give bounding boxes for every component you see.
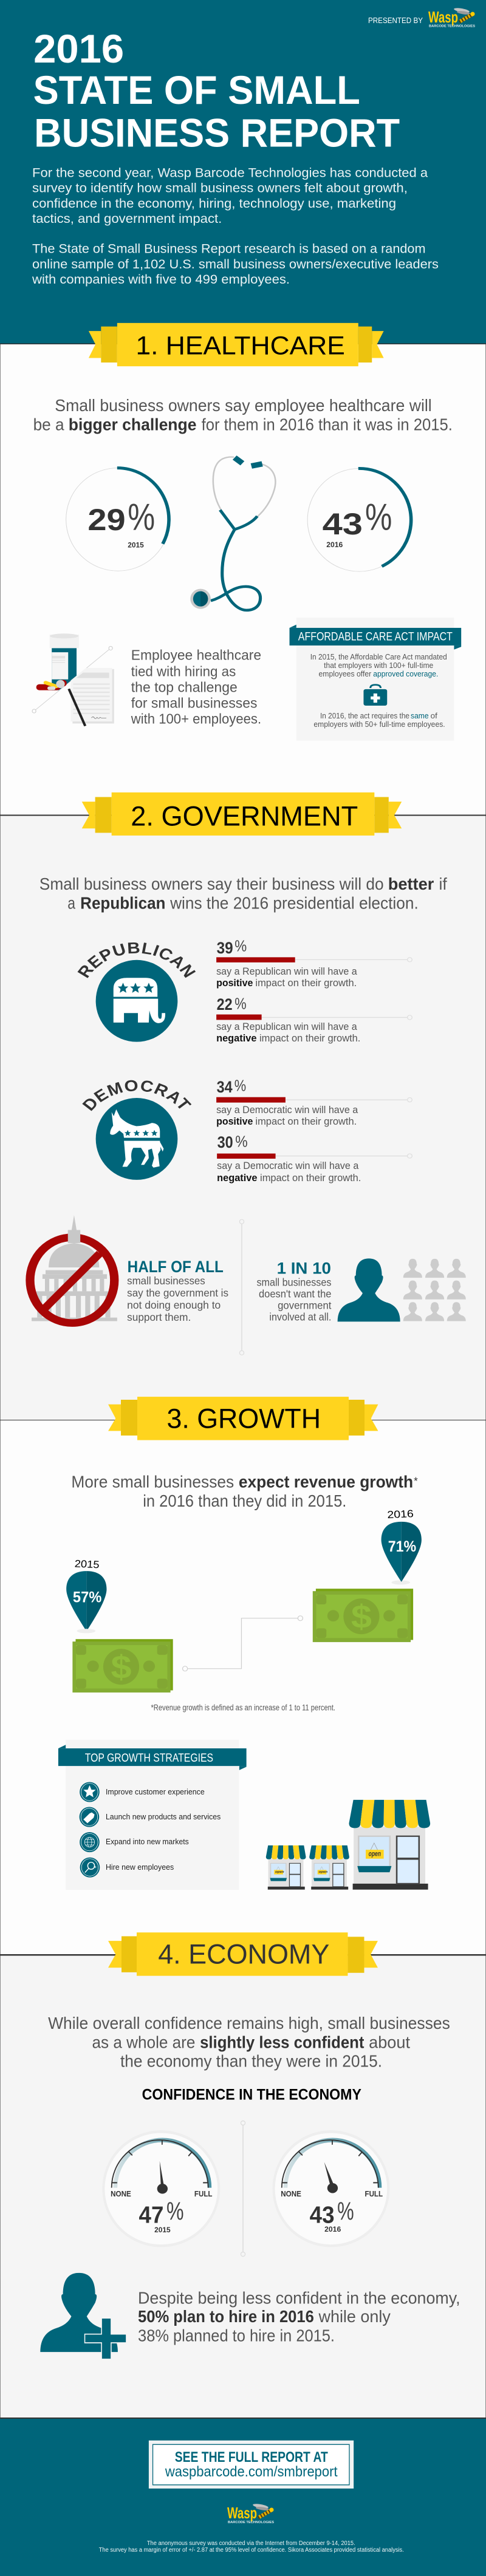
strategy: improve customer experience [80, 1782, 205, 1802]
icon: one in ten people [338, 1258, 466, 1321]
banner: 2. government [82, 792, 402, 836]
logo: presented by Wasp Barcode Technologies: Wasp [428, 8, 458, 26]
stat: 30% negative democrat: impact on their growth. [260, 1172, 361, 1184]
fine print [99, 2540, 404, 2554]
text: hiring plans: 38% planned to hire in 2015. [138, 2326, 335, 2345]
gauge: 47% 2015: % [166, 2197, 184, 2226]
title [33, 27, 400, 155]
strategy: improve customer experience: Improve customer experience [106, 1787, 205, 1796]
section: healthcare [32, 397, 461, 741]
heading: * [414, 1475, 418, 1487]
stat: 30% negative democrat: % [235, 1133, 248, 1150]
text: top challenge: Employee healthcare [131, 648, 261, 663]
stat: 22% negative republican: impact on their growth. [259, 1032, 360, 1044]
stat: 39% positive republican: impact on their growth. [255, 977, 357, 989]
heading: if [439, 875, 447, 894]
banner: 3. growth [108, 1397, 378, 1440]
pin: 2015 57%: 57% [73, 1589, 101, 1606]
callout: 1 in 10: involved at all. [269, 1312, 331, 1323]
gauge: 47% 2015: FULL [194, 2189, 213, 2198]
stat: 34% positive democrat: 34 [217, 1078, 233, 1097]
stat: 34% positive democrat: % [234, 1077, 246, 1094]
heading: expect revenue growth [239, 1473, 413, 1491]
stat: 22% negative republican: say a Republican win will have a [216, 1021, 358, 1032]
text: hiring plans: Despite being less confident in the economy, [138, 2289, 460, 2308]
title: STATE OF SMALL [33, 68, 360, 112]
footnote: *Revenue growth is defined as an increase of 1 to 11 percent. [151, 1703, 335, 1712]
text: top challenge: the top challenge [131, 680, 238, 695]
panel: affordable care act impact [290, 618, 461, 741]
stat: 34% positive democrat: say a Democratic win will have a [216, 1104, 358, 1116]
panel: affordable care act impact: of [431, 711, 437, 720]
text: hiring plans: while only [318, 2307, 391, 2326]
icon: first aid kit [363, 685, 387, 706]
panel: affordable care act impact: In 2016, the act requires the [320, 711, 409, 720]
callout: half of all [127, 1258, 228, 1324]
stat: 30% negative democrat: say a Democratic win will have a [217, 1160, 359, 1171]
stat: 30% negative democrat: negative [217, 1172, 257, 1184]
stat: 22% negative republican: negative [216, 1032, 256, 1044]
introduction text [32, 166, 439, 287]
donut: 29% 2015: % [128, 496, 155, 538]
gauge: 47% 2015: 2015 [154, 2226, 171, 2234]
callout: half of all: support them. [127, 1312, 191, 1324]
callout: 1 in 10: small businesses [256, 1277, 331, 1289]
heading line: the economy than they were in 2015. [120, 2052, 382, 2071]
section: government callouts and growth heading [30, 1215, 466, 1631]
icon: republican elephant [78, 942, 196, 1042]
call to action box: SEE THE FULL REPORT AT [175, 2448, 328, 2465]
gauge: 47% 2015: 47 [139, 2201, 163, 2228]
text: top challenge: tied with hiring as [131, 664, 236, 680]
section: growth illustrations and economy heading [48, 1589, 450, 2052]
text: hiring plans: 50% plan to hire in 2016 [138, 2307, 314, 2326]
text: top challenge: with 100+ employees. [131, 712, 261, 727]
panel: affordable care act impact: that employers with 100+ full-time [324, 661, 433, 670]
heading: about [369, 2033, 411, 2052]
gauge: 43% 2016 [272, 2130, 389, 2247]
panel: affordable care act impact: same [411, 711, 429, 720]
stat: 34% positive democrat: impact on their growth. [255, 1116, 357, 1127]
callout: 1 in 10: 1 IN 10 [277, 1259, 331, 1278]
donut: 43% 2016: % [365, 496, 392, 538]
heading: in 2016 than they did in 2015. [143, 1492, 346, 1510]
icon: stethoscope [190, 457, 275, 610]
icon: capitol with prohibition sign [30, 1215, 117, 1323]
fine print: The anonymous survey was conducted via the Internet from December 9-14, 2015. [147, 2540, 355, 2547]
icon: dollar bill 2015: $ [111, 1649, 132, 1686]
text: top challenge [131, 648, 261, 727]
donut: 29% 2015: 29 [87, 503, 126, 537]
logo: presented by Wasp Barcode Technologies: BARCODE TECHNOLOGIES [429, 24, 475, 28]
heading: Republican [80, 894, 165, 913]
title and introduction [32, 27, 439, 366]
icon: republican elephant: REPUBLICAN [78, 942, 196, 978]
callout: 1 in 10: doesn't want the [259, 1289, 331, 1300]
stat: 22% negative republican: 22 [217, 996, 233, 1014]
pin: 2016 71%: 2016 [387, 1508, 414, 1521]
banner: 4. economy: 4. ECONOMY [158, 1940, 329, 1970]
donut: 43% 2016: 2016 [326, 540, 343, 549]
heading: slightly less confident [200, 2033, 364, 2052]
gauge: 43% 2016: % [337, 2197, 354, 2226]
stat: 39% positive republican: 39 [217, 939, 233, 958]
stat: 39% positive republican: positive [216, 977, 253, 989]
gauge: 43% 2016: 43 [310, 2201, 335, 2228]
panel: affordable care act impact: employees offer [318, 669, 372, 678]
donut: 29% 2015: 2015 [128, 540, 144, 549]
heading [48, 2014, 450, 2052]
heading: Small business owners say their business will do [39, 875, 384, 894]
icon: pill bottle and contract [32, 633, 114, 726]
stat: 39% positive republican [216, 937, 412, 989]
icon: dollar bill 2016 [313, 1589, 413, 1642]
panel: affordable care act impact: In 2015, the Affordable Care Act mandated [310, 652, 447, 661]
callout: 1 in 10: government [278, 1300, 332, 1312]
icon: storefronts: open [275, 1870, 284, 1874]
chart title: CONFIDENCE IN THE ECONOMY [142, 2087, 361, 2104]
introduction text: with companies with five to 499 employees. [32, 272, 290, 287]
introduction text: tactics, and government impact. [32, 211, 222, 226]
banner: 2. government: 2. GOVERNMENT [131, 801, 358, 832]
stat: 39% positive republican: say a Republican win will have a [216, 966, 358, 977]
strategy: launch new products [80, 1807, 221, 1827]
gauge: 43% 2016: FULL [365, 2189, 383, 2198]
icon: dollar bill 2016: $ [351, 1599, 372, 1635]
heading: a [67, 894, 75, 913]
donut: 29% 2015 [66, 468, 170, 571]
pin: 2016 71%: 71% [388, 1538, 416, 1555]
gauge: 43% 2016: NONE [281, 2189, 301, 2198]
gauge: 47% 2015 [102, 2130, 220, 2247]
stat: 39% positive republican: % [234, 937, 247, 955]
icon: person with plus [40, 2273, 126, 2359]
heading [33, 397, 453, 434]
text: hiring plans [138, 2289, 460, 2345]
callout: half of all: small businesses [127, 1275, 205, 1287]
banner: 3. growth: 3. GROWTH [166, 1403, 321, 1434]
gauge: 43% 2016: 2016 [324, 2226, 341, 2234]
heading [71, 1473, 418, 1510]
banner: 4. economy [108, 1932, 378, 1976]
section: government survey results [39, 792, 447, 1184]
heading: be a [33, 415, 64, 434]
heading: bigger challenge [69, 415, 196, 434]
callout: half of all: say the government is [127, 1287, 228, 1300]
stat: 34% positive democrat [216, 1077, 412, 1127]
stat: 34% positive democrat: positive [216, 1116, 253, 1127]
heading: as a whole are [92, 2033, 195, 2052]
panel: affordable care act impact: approved coverage. [373, 669, 438, 678]
strategy: hire new employees [80, 1858, 174, 1878]
pin: 2015 57% [66, 1558, 107, 1631]
introduction text: confidence in the economy, hiring, technology use, marketing [32, 196, 396, 211]
logo: Wasp Barcode Technologies footer: BARCODE TECHNOLOGIES [228, 2521, 274, 2524]
heading: better [388, 875, 434, 894]
section: economy and footer [40, 2052, 460, 2554]
banner: 1. healthcare [89, 323, 384, 366]
logo: Wasp Barcode Technologies footer: Wasp [227, 2504, 257, 2522]
title: 2016 [33, 27, 124, 71]
call to action box: waspbarcode.com/smbreport [165, 2463, 338, 2479]
strategy: expand into new markets [80, 1832, 189, 1852]
introduction text: survey to identify how small business owners felt about growth, [32, 181, 408, 196]
callout: 1 in 10 [256, 1259, 332, 1323]
stat: 22% negative republican: % [234, 995, 247, 1012]
callout: half of all: not doing enough to [127, 1300, 221, 1312]
panel: top growth strategies [58, 1740, 247, 1890]
heading: More small businesses [71, 1473, 234, 1491]
donut: 43% 2016: 43 [323, 507, 363, 541]
icon: dollar bill 2015 [72, 1639, 173, 1692]
heading [39, 875, 447, 913]
strategy: expand into new markets: Expand into new markets [106, 1837, 189, 1846]
logo: presented by Wasp Barcode Technologies [368, 7, 475, 28]
banner: 1. healthcare: 1. HEALTHCARE [135, 332, 345, 360]
pin: 2016 71% [382, 1508, 422, 1584]
heading: wins the 2016 presidential election. [169, 894, 419, 913]
icon: democrat donkey: DEMOCRAT [82, 1080, 192, 1111]
icon: storefronts [266, 1800, 430, 1890]
call to action box [149, 2441, 354, 2489]
strategy: hire new employees: Hire new employees [106, 1862, 174, 1872]
callout: half of all: HALF OF ALL [128, 1258, 224, 1276]
pin: 2015 57%: 2015 [74, 1558, 100, 1570]
fine print: The survey has a margin of error of +/- 2.87 at the 95% level of confidence. Sikora Associates provided statistical analysis. [99, 2547, 404, 2554]
icon: democrat donkey [82, 1080, 192, 1180]
gauge: 47% 2015: NONE [111, 2189, 131, 2198]
stat: 30% negative democrat: 30 [217, 1134, 233, 1152]
icon: storefronts: open [318, 1870, 328, 1874]
strategy: launch new products: Launch new products and services [106, 1812, 221, 1821]
panel: affordable care act impact: employers with 50+ full-time employees. [313, 720, 445, 729]
stat: 22% negative republican [216, 995, 412, 1044]
logo: presented by Wasp Barcode Technologies: PRESENTED BY [368, 16, 423, 25]
icon: storefronts: open [369, 1850, 381, 1858]
text: top challenge: for small businesses [131, 696, 257, 711]
panel: top growth strategies: TOP GROWTH STRATEGIES [85, 1751, 213, 1765]
stat: 30% negative democrat [217, 1133, 412, 1184]
donut: 43% 2016 [307, 468, 411, 571]
